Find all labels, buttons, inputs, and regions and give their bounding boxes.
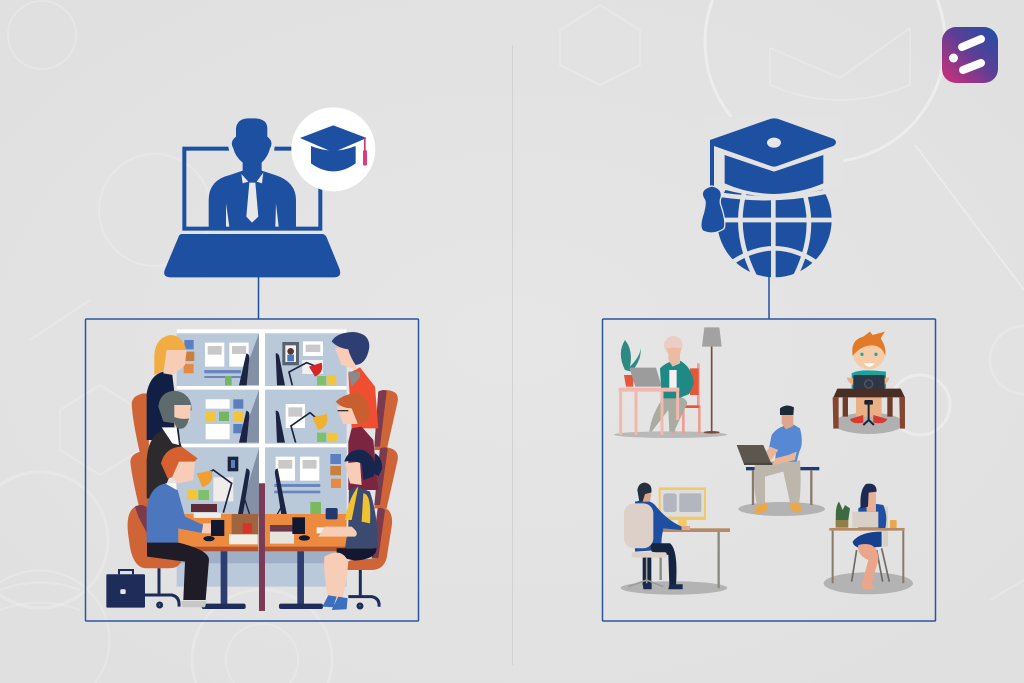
logo badge: [942, 27, 998, 83]
scene: man at monitor from behind: [621, 483, 730, 595]
scene: woman with laptop: [824, 484, 913, 594]
center divider: [512, 45, 514, 665]
pinned notes and monitors: [184, 340, 341, 532]
scene: man with laptop on bench: [737, 406, 825, 516]
graduation cap badge: [291, 107, 375, 191]
chairs: [128, 390, 398, 570]
desk: [178, 502, 347, 609]
chair bases: [145, 568, 379, 608]
connector left: [258, 277, 260, 319]
panel: office cubicles: [86, 319, 418, 621]
scene: older woman at desk: [614, 327, 727, 438]
connector right: [768, 277, 770, 319]
person: dark-haired woman in vest: [318, 450, 382, 610]
icon: online teacher on laptop: [164, 107, 375, 277]
cubicle wall: [177, 329, 347, 611]
person: bearded man: [147, 391, 192, 500]
laptop screen frame: [184, 149, 320, 229]
panel: remote learners: [602, 319, 936, 621]
scene: boy at desk: [833, 332, 905, 434]
mortarboard cap: [701, 118, 836, 232]
person: redhead woman with glasses: [336, 394, 378, 490]
icon: briefcase: [106, 570, 145, 608]
monitors lower: [237, 468, 250, 522]
teacher silhouette: [209, 118, 296, 227]
icon: graduation cap on globe: [701, 117, 843, 283]
globe: [703, 117, 843, 283]
person: dark hair man in red: [332, 332, 378, 428]
person: blonde woman: [147, 335, 187, 440]
laptop base: [164, 234, 340, 277]
person: redhead man in blue sweater: [147, 447, 224, 607]
